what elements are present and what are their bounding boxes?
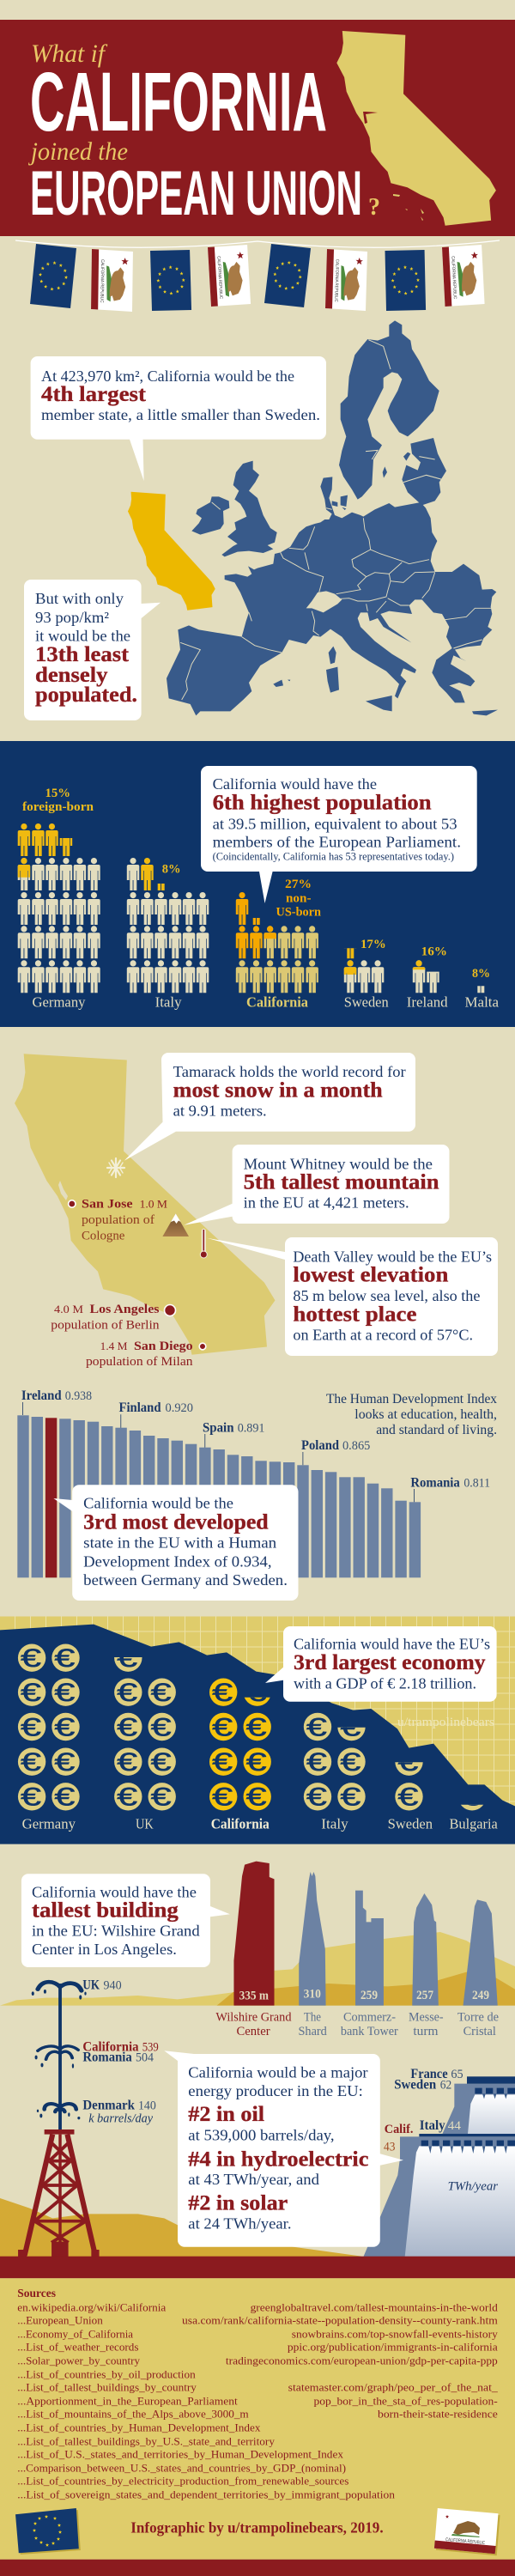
callout: HDI: state in the EU with a Human [83, 1534, 276, 1552]
chart: Italy coins: € [306, 1713, 327, 1741]
chart: UK coins: € [151, 1713, 172, 1741]
callout: Death Valley [207, 1237, 498, 1356]
building names: Torre de [457, 2010, 499, 2024]
building names: Commerz- [343, 2010, 396, 2024]
flag: EU [30, 244, 76, 308]
sources list: left: ...Economy_of_California [17, 2328, 133, 2340]
building: Commerzbank Tower [355, 1891, 384, 2006]
chart: UK coins: € [117, 1783, 138, 1812]
callout: economy [265, 1626, 497, 1702]
sources list: left: ...Comparison_between_U.S._states_and_countries_by_GDP_(nominal) [17, 2462, 346, 2474]
chart: UK coins: € [151, 1679, 172, 1707]
callout: snow [124, 1053, 415, 1161]
bunting flags [15, 240, 500, 312]
callout: energy: #4 in hydroelectric [188, 2148, 368, 2171]
buildings [233, 1862, 498, 2006]
dam labels: 43 [384, 2140, 395, 2154]
building names: turm [413, 2025, 439, 2038]
chart: UK coins: € [151, 1748, 172, 1777]
chart: California coins: € [246, 1748, 267, 1777]
callout: density: populated. [35, 683, 137, 707]
sources list: left: ...List_of_U.S._states_and_territories_by_Human_Development_Index [17, 2448, 344, 2460]
city: San Jose: Cologne [82, 1229, 125, 1242]
callout: area: At 423,970 km², California would be the [41, 368, 294, 385]
chart: hydroelectric dams [363, 2076, 515, 2257]
callout: density: 93 pop/km² [35, 609, 109, 626]
credit: Infographic by u/trampolinebears, 2019. [130, 2518, 384, 2536]
sources list: left: ...List_of_tallest_buildings_by_U.S._state_and_territory [17, 2435, 276, 2447]
callout: density: 13th least [35, 643, 130, 666]
heading: sources: Sources [17, 2287, 57, 2300]
percentage labels: 27% [285, 878, 312, 891]
chart: UK coins: € [117, 1644, 138, 1673]
city: San Diego: population of Milan [86, 1355, 193, 1369]
sources list: right: pop_bor_in_the_sta_of_res-population- [314, 2395, 498, 2407]
bar labels [21, 1388, 490, 1490]
city: San Diego: 1.4 M [100, 1340, 128, 1352]
dam labels: France [410, 2067, 448, 2081]
callout: Death Valley: 85 m below sea level, also the [293, 1287, 480, 1304]
building names: Cristal [464, 2025, 496, 2038]
flag: California footer [434, 2508, 500, 2555]
dam labels: 62 [440, 2079, 451, 2093]
dam labels: 65 [451, 2068, 464, 2081]
country labels: California [246, 994, 308, 1011]
chart: California coins: € [246, 1783, 267, 1812]
oil labels: 940 [103, 1979, 122, 1993]
bar labels: Romania [410, 1475, 460, 1490]
bar labels: 0.920 [165, 1401, 193, 1415]
callout: snow: Tamarack holds the world record for [173, 1063, 406, 1080]
callout: population: at 39.5 million, equivalent to about 53 [213, 816, 457, 833]
percentage labels: 17% [360, 938, 386, 951]
country labels: Germany [22, 1815, 76, 1832]
chart: Italy coins: € [340, 1783, 361, 1812]
chart: Italy coins: € [306, 1783, 327, 1812]
callout: density [24, 580, 161, 720]
callout: population: California would have the [213, 775, 377, 793]
sources list: right [182, 2302, 499, 2421]
percentage labels: 16% [421, 945, 447, 959]
chart: Malta people [477, 986, 484, 993]
country labels: Ireland [407, 994, 448, 1011]
sources list: left: en.wikipedia.org/wiki/California [17, 2302, 167, 2314]
country labels [33, 994, 499, 1011]
callout: population: (Coincidentally, California has 53 representatives today.) [213, 851, 454, 863]
panel: population [0, 741, 515, 1027]
building names: Center [237, 2025, 270, 2038]
city: San Diego [86, 1340, 206, 1369]
building heights: 249 [472, 1989, 489, 2002]
callout: energy: at 24 TWh/year. [188, 2215, 292, 2233]
sources list: left: ...List_of_countries_by_oil_production [17, 2368, 196, 2380]
sources list: right: greenglobaltravel.com/tallest-mountains-in-the-world [251, 2302, 499, 2314]
dam labels [384, 2067, 498, 2194]
chart: Germany coins: € [54, 1679, 76, 1707]
icon: snowflake [107, 1158, 124, 1177]
oil labels: Romania [82, 2050, 132, 2065]
flag: California [208, 245, 251, 307]
building: Torre de Cristal [464, 1899, 498, 2006]
map: European Union [167, 320, 498, 715]
sources list: right: usa.com/rank/california-state--population-density--county-rank.htm [182, 2315, 498, 2327]
California large shape [15, 1054, 275, 1355]
percentage labels: non- [286, 892, 311, 906]
sources list: left: ...List_of_weather_records [17, 2341, 139, 2353]
callout: mountain: in the EU at 4,421 meters. [244, 1194, 409, 1212]
callout: energy: #2 in oil [188, 2103, 264, 2126]
panel: California map with facts [15, 1053, 498, 1369]
callout: tallest building: Center in Los Angeles. [32, 1941, 177, 1958]
callout: HDI [53, 1485, 299, 1601]
building heights: 257 [416, 1989, 433, 2002]
chart: Germany coins: € [21, 1783, 41, 1812]
flag: California [325, 249, 367, 311]
callout: Death Valley: on Earth at a record of 57°C. [293, 1327, 473, 1344]
percentage labels [22, 787, 490, 981]
title: joined the: joined the [27, 137, 128, 166]
flag: California [442, 245, 485, 307]
building heights: 259 [360, 1989, 378, 2002]
city: Los Angeles [51, 1303, 175, 1332]
dam labels: Sweden [394, 2078, 436, 2093]
chart: Italy coins: € [306, 1748, 327, 1777]
callout: energy: energy producer in the EU: [188, 2082, 363, 2099]
panel: GDP [0, 1616, 515, 1844]
callout: HDI: California would be the [83, 1495, 233, 1512]
country labels: Italy [155, 994, 182, 1011]
callout: energy: California would be a major [188, 2063, 368, 2081]
panel: Human Development Index [17, 1388, 497, 1601]
percentage labels: US-born [276, 906, 322, 920]
callout: population [201, 766, 477, 903]
country labels: Malta [465, 994, 499, 1011]
callout: area: member state, a little smaller than Sweden. [41, 406, 320, 423]
icon: California silhouette [336, 31, 496, 226]
dam labels: Calif. [385, 2123, 414, 2136]
building names: Shard [299, 2025, 327, 2038]
icon: thermometer [200, 1229, 207, 1258]
sources list: right: ppic.org/publication/immigrants-in-california [288, 2341, 498, 2353]
panel: energy [0, 1978, 515, 2258]
percentage labels: 8% [162, 863, 180, 877]
callout: area [31, 356, 326, 481]
sources list: left: ...List_of_countries_by_Human_Development_Index [17, 2421, 261, 2433]
watermark: u/trampolinebears [397, 1716, 494, 1729]
chart: Germany coins: € [21, 1713, 41, 1741]
callout: density: But with only [35, 590, 124, 607]
city: Los Angeles: 4.0 M [54, 1303, 83, 1315]
sources list: right: born-their-state-residence [378, 2409, 498, 2421]
country labels [22, 1815, 498, 1832]
bar labels: Ireland [21, 1388, 62, 1403]
percentage labels: foreign-born [22, 800, 94, 814]
oil labels: Denmark [82, 2099, 135, 2113]
icon: mountain [162, 1213, 189, 1236]
callout: population: 6th highest population [213, 792, 432, 815]
callout: economy: 3rd largest economy [294, 1651, 486, 1674]
dam labels: 44 [448, 2119, 462, 2133]
bar labels: 0.811 [464, 1476, 490, 1490]
dam labels: Italy [420, 2118, 445, 2133]
callout: mountain [184, 1145, 450, 1225]
text: HDI note: looks at education, health, [354, 1407, 497, 1422]
flag: California: CALIFORNIA REPUBLIC [215, 256, 223, 300]
panel: sources footer [0, 2257, 515, 2576]
callout: energy: at 43 TWh/year, and [188, 2171, 319, 2188]
building heights: 310 [304, 1988, 321, 2002]
flag: EU [385, 250, 426, 311]
callout: HDI: 3rd most developed [83, 1511, 269, 1534]
country labels: California [211, 1815, 270, 1832]
callout: snow: at 9.91 meters. [173, 1102, 267, 1119]
sources list: left: ...European_Union [17, 2315, 104, 2327]
city: San Diego: San Diego [134, 1340, 193, 1353]
callout: Death Valley: hottest place [293, 1303, 416, 1326]
flag: California [91, 249, 133, 312]
chart: Italy people [127, 858, 209, 993]
bar labels: Finland [118, 1400, 161, 1415]
oil labels: 539 [142, 2040, 159, 2054]
sources list: left [17, 2302, 396, 2500]
sources list: right: snowbrains.com/top-snowfall-events-history [292, 2328, 499, 2340]
sources list: left: ...List_of_tallest_buildings_by_country [17, 2381, 197, 2393]
oil labels: k barrels/day [88, 2112, 153, 2126]
flag: California: CALIFORNIA REPUBLIC [99, 259, 105, 303]
chart: California people [236, 892, 318, 993]
chart: Germany coins: € [54, 1644, 76, 1673]
chart: Germany coins: € [21, 1748, 41, 1777]
title: What if: What if [31, 39, 108, 68]
country labels: Italy [321, 1815, 348, 1832]
oil labels: UK [82, 1978, 100, 1993]
flag: EU [150, 250, 191, 311]
flag: California footer: CALIFORNIA REPUBLIC [445, 2537, 485, 2546]
chart: Germany coins: € [21, 1679, 41, 1707]
callout: economy: California would have the EU’s [294, 1636, 490, 1653]
chart: Germany coins: € [21, 1644, 41, 1673]
callout: mountain: Mount Whitney would be the [244, 1155, 433, 1172]
chart: Germany coins [18, 1643, 80, 1812]
callout: tallest building: tallest building [32, 1899, 179, 1922]
callout: energy [164, 2050, 403, 2247]
chart: oil derrick and jets [18, 1982, 100, 2257]
sources list: left: ...List_of_countries_by_electricity_production_from_renewable_sources [17, 2475, 349, 2487]
bar labels: Spain [203, 1420, 234, 1435]
sources list: right: tradingeconomics.com/european-union/gdp-per-capita-ppp [226, 2354, 498, 2366]
building heights: 335 m [239, 1989, 269, 2002]
building names: The [304, 2010, 321, 2024]
chart: Germany coins: € [54, 1748, 76, 1777]
building: Wilshire Grand [233, 1862, 275, 2006]
chart: California coins [209, 1678, 271, 1812]
chart: Italy coins: € [340, 1713, 361, 1741]
flag: California: CALIFORNIA REPUBLIC [333, 259, 340, 302]
chart: Sweden coins: € [397, 1783, 419, 1812]
chart: UK coins [114, 1643, 176, 1812]
hills at bottom [0, 2198, 361, 2258]
callout: HDI: between Germany and Sweden. [83, 1571, 288, 1589]
building names [215, 2010, 499, 2038]
panel: tallest buildings [0, 1862, 515, 2038]
building: The Shard [299, 1872, 326, 2006]
flag: EU footer [15, 2508, 81, 2555]
oil labels [82, 1978, 159, 2126]
sources list: left: ...List_of_mountains_of_the_Alps_above_3000_m [17, 2409, 249, 2421]
chart: Germany coins: € [54, 1713, 76, 1741]
city: San Jose: San Jose [82, 1198, 133, 1212]
callout: energy: at 539,000 barrels/day, [188, 2127, 335, 2144]
building names: Messe- [409, 2010, 444, 2024]
callout: Death Valley: Death Valley would be the EU’s [293, 1248, 492, 1265]
sources list: left: ...Apportionment_in_the_European_Parliament [17, 2395, 238, 2407]
California shape on map [128, 492, 215, 611]
building names: bank Tower [341, 2025, 398, 2038]
chart: Italy coins [304, 1713, 366, 1812]
callout: tallest building: California would have the [32, 1883, 197, 1900]
callout: Death Valley: lowest elevation [293, 1264, 448, 1287]
city: Los Angeles: Los Angeles [89, 1303, 160, 1316]
country labels: Germany [33, 994, 86, 1011]
building: Messeturm [412, 1893, 439, 2006]
callout: HDI: Development Index of 0.934, [83, 1552, 271, 1570]
chart: California coins: € [246, 1679, 267, 1707]
text: HDI note [326, 1392, 497, 1437]
chart: Sweden coins: € [397, 1748, 419, 1777]
chart: UK coins: € [151, 1783, 172, 1812]
chart: Bulgaria coin: € [461, 1783, 482, 1812]
oil labels: California [82, 2039, 139, 2054]
title: question mark: ? [368, 194, 380, 221]
city: San Jose: 1.0 M [140, 1198, 167, 1211]
sources list: left: ...Solar_power_by_country [17, 2354, 141, 2366]
callout: population: members of the European Parliament. [213, 834, 461, 851]
percentage labels: 15% [45, 787, 70, 800]
chart: California coins: € [212, 1713, 233, 1741]
callout: tallest building: in the EU: Wilshire Grand [32, 1922, 200, 1939]
percentage labels: 8% [472, 967, 490, 981]
text: HDI note: and standard of living. [376, 1423, 497, 1437]
chart: Bulgaria coin [460, 1805, 484, 1810]
callout: area: 4th largest [41, 383, 147, 406]
chart: Italy coins: € [340, 1748, 361, 1777]
sources list: right: statemaster.com/graph/peo_per_of_the_nat_ [288, 2381, 499, 2393]
bar labels: 0.865 [342, 1439, 370, 1453]
hills behind buildings [0, 1932, 515, 2006]
bar labels: Poland [301, 1438, 339, 1453]
oil labels: 140 [138, 2099, 156, 2113]
text: HDI note: The Human Development Index [326, 1392, 497, 1406]
flag: EU [264, 244, 311, 307]
dam labels: TWh/year [448, 2180, 498, 2194]
chart: California coins: € [212, 1783, 233, 1812]
chart: Germany people [18, 823, 100, 993]
building heights [239, 1988, 489, 2002]
chart: UK coins: € [117, 1679, 138, 1707]
callout: tallest building [21, 1874, 230, 1967]
sources list: left: ...List_of_sovereign_states_and_dependent_territories_by_immigrant_population [17, 2488, 396, 2500]
building names: Wilshire Grand [215, 2010, 292, 2024]
bar chart [17, 1415, 421, 1577]
chart: UK coins: € [117, 1713, 138, 1741]
country labels: UK [136, 1815, 154, 1832]
country labels: Sweden [344, 994, 389, 1011]
callout: energy: #2 in solar [188, 2191, 288, 2215]
city: San Jose [69, 1198, 167, 1242]
chart: Sweden coins [395, 1762, 423, 1810]
oil labels: 504 [136, 2051, 154, 2065]
callout: density: it would be the [35, 628, 130, 645]
callout: economy: with a GDP of € 2.18 trillion. [294, 1675, 476, 1692]
callout: mountain: 5th tallest mountain [244, 1170, 439, 1194]
chart: Germany coins: € [54, 1783, 76, 1812]
city: Los Angeles: population of Berlin [51, 1318, 160, 1332]
callout: snow: most snow in a month [173, 1078, 383, 1102]
bar labels: 0.891 [238, 1421, 264, 1435]
chart: California coins: € [246, 1713, 267, 1741]
chart: California coins: € [212, 1679, 233, 1707]
country labels: Bulgaria [450, 1815, 498, 1832]
bar labels: 0.938 [65, 1389, 92, 1403]
chart: California coins: € [212, 1748, 233, 1777]
chart: Sweden people [343, 948, 385, 993]
chart: UK coins: € [117, 1748, 138, 1777]
panel: title header [0, 20, 515, 236]
city: San Jose: population of [82, 1213, 154, 1227]
callout: density: densely [35, 664, 108, 687]
chart: Ireland people [413, 960, 439, 993]
country labels: Sweden [388, 1815, 433, 1832]
flag: California: CALIFORNIA REPUBLIC [450, 256, 457, 300]
